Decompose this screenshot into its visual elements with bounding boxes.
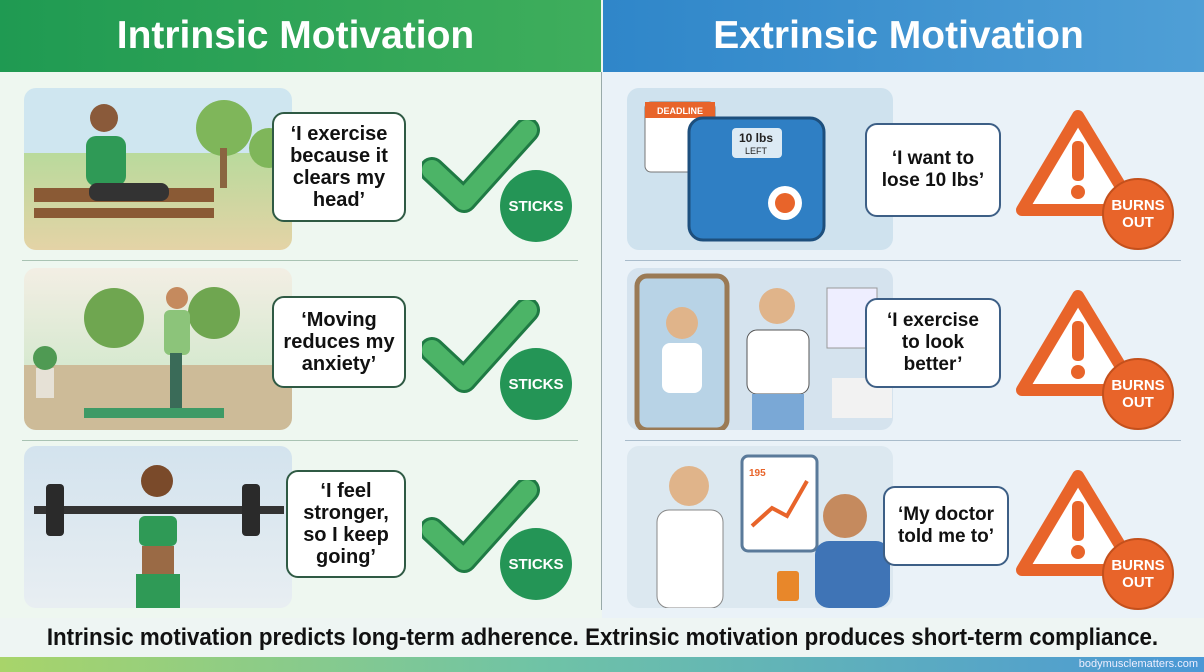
panel: intrinsic row 2 <box>24 268 572 430</box>
badge: burns out: OUT <box>1122 574 1154 591</box>
badge: sticks <box>500 348 572 420</box>
speech bubble: ‘I want to lose 10 lbs’ <box>882 148 984 191</box>
badge: burns out: BURNS <box>1111 377 1165 394</box>
illustration: doctor <box>627 446 893 608</box>
icon: warning <box>1016 470 1124 576</box>
illustration: scale with deadline: DEADLINE <box>657 106 703 116</box>
header: extrinsic: Extrinsic Motivation <box>713 14 1084 57</box>
badge: sticks: STICKS <box>508 556 564 572</box>
panel: intrinsic row 1 <box>24 88 572 250</box>
speech bubble: ‘My doctor told me to’ <box>898 504 994 547</box>
panel: intrinsic row 3 <box>24 446 572 608</box>
badge: burns out: OUT <box>1122 394 1154 411</box>
icon: check <box>422 480 540 573</box>
badge: sticks: STICKS <box>508 198 564 214</box>
badge: sticks <box>500 170 572 242</box>
speech bubble <box>272 112 406 222</box>
badge: sticks: STICKS <box>508 376 564 392</box>
background left <box>0 72 601 620</box>
badge: burns out: BURNS <box>1111 197 1165 214</box>
badge: burns out: BURNS <box>1111 557 1165 574</box>
speech bubble: ‘I exercise because it clears my head’ <box>290 123 388 211</box>
icon: warning <box>1016 290 1124 396</box>
footer caption: Intrinsic motivation predicts long-term adherence. Extrinsic motivation produces short-term compliance. <box>46 624 1158 650</box>
badge: burns out <box>1102 178 1174 250</box>
speech bubble <box>865 123 1001 217</box>
illustration: mirror <box>627 268 893 430</box>
speech bubble: ‘I exercise to look better’ <box>887 310 979 375</box>
header: intrinsic: Intrinsic Motivation <box>117 14 474 57</box>
badge: burns out: OUT <box>1122 214 1154 231</box>
header: intrinsic <box>0 0 601 72</box>
illustration: barbell <box>24 446 292 608</box>
speech bubble <box>272 296 406 388</box>
badge: burns out <box>1102 358 1174 430</box>
speech bubble: ‘I feel stronger, so I keep going’ <box>303 480 389 568</box>
icon: check <box>422 120 540 213</box>
illustration: scale with deadline: LEFT <box>745 146 768 156</box>
illustration: doctor: 195 <box>749 468 766 479</box>
panel: extrinsic row 1 <box>627 88 1174 250</box>
background right <box>602 72 1204 620</box>
icon: warning <box>1016 110 1124 216</box>
icon: check <box>422 300 540 393</box>
footer caption <box>0 618 1204 657</box>
badge: burns out <box>1102 538 1174 610</box>
panel: extrinsic row 3 <box>627 446 1174 610</box>
illustration: scale with deadline <box>627 88 893 250</box>
speech bubble: ‘Moving reduces my anxiety’ <box>283 309 395 375</box>
speech bubble <box>883 486 1009 566</box>
bottom gradient bar <box>0 657 1204 672</box>
panel: extrinsic row 2 <box>627 268 1174 430</box>
speech bubble <box>865 298 1001 388</box>
badge: sticks <box>500 528 572 600</box>
speech bubble <box>286 470 406 578</box>
illustration: yoga <box>24 268 292 430</box>
header: extrinsic <box>603 0 1204 72</box>
bottom gradient bar: bodymusclematters.com <box>1079 658 1198 670</box>
illustration: scale with deadline: 10 lbs <box>739 131 773 145</box>
illustration: woman on bench <box>24 88 292 250</box>
